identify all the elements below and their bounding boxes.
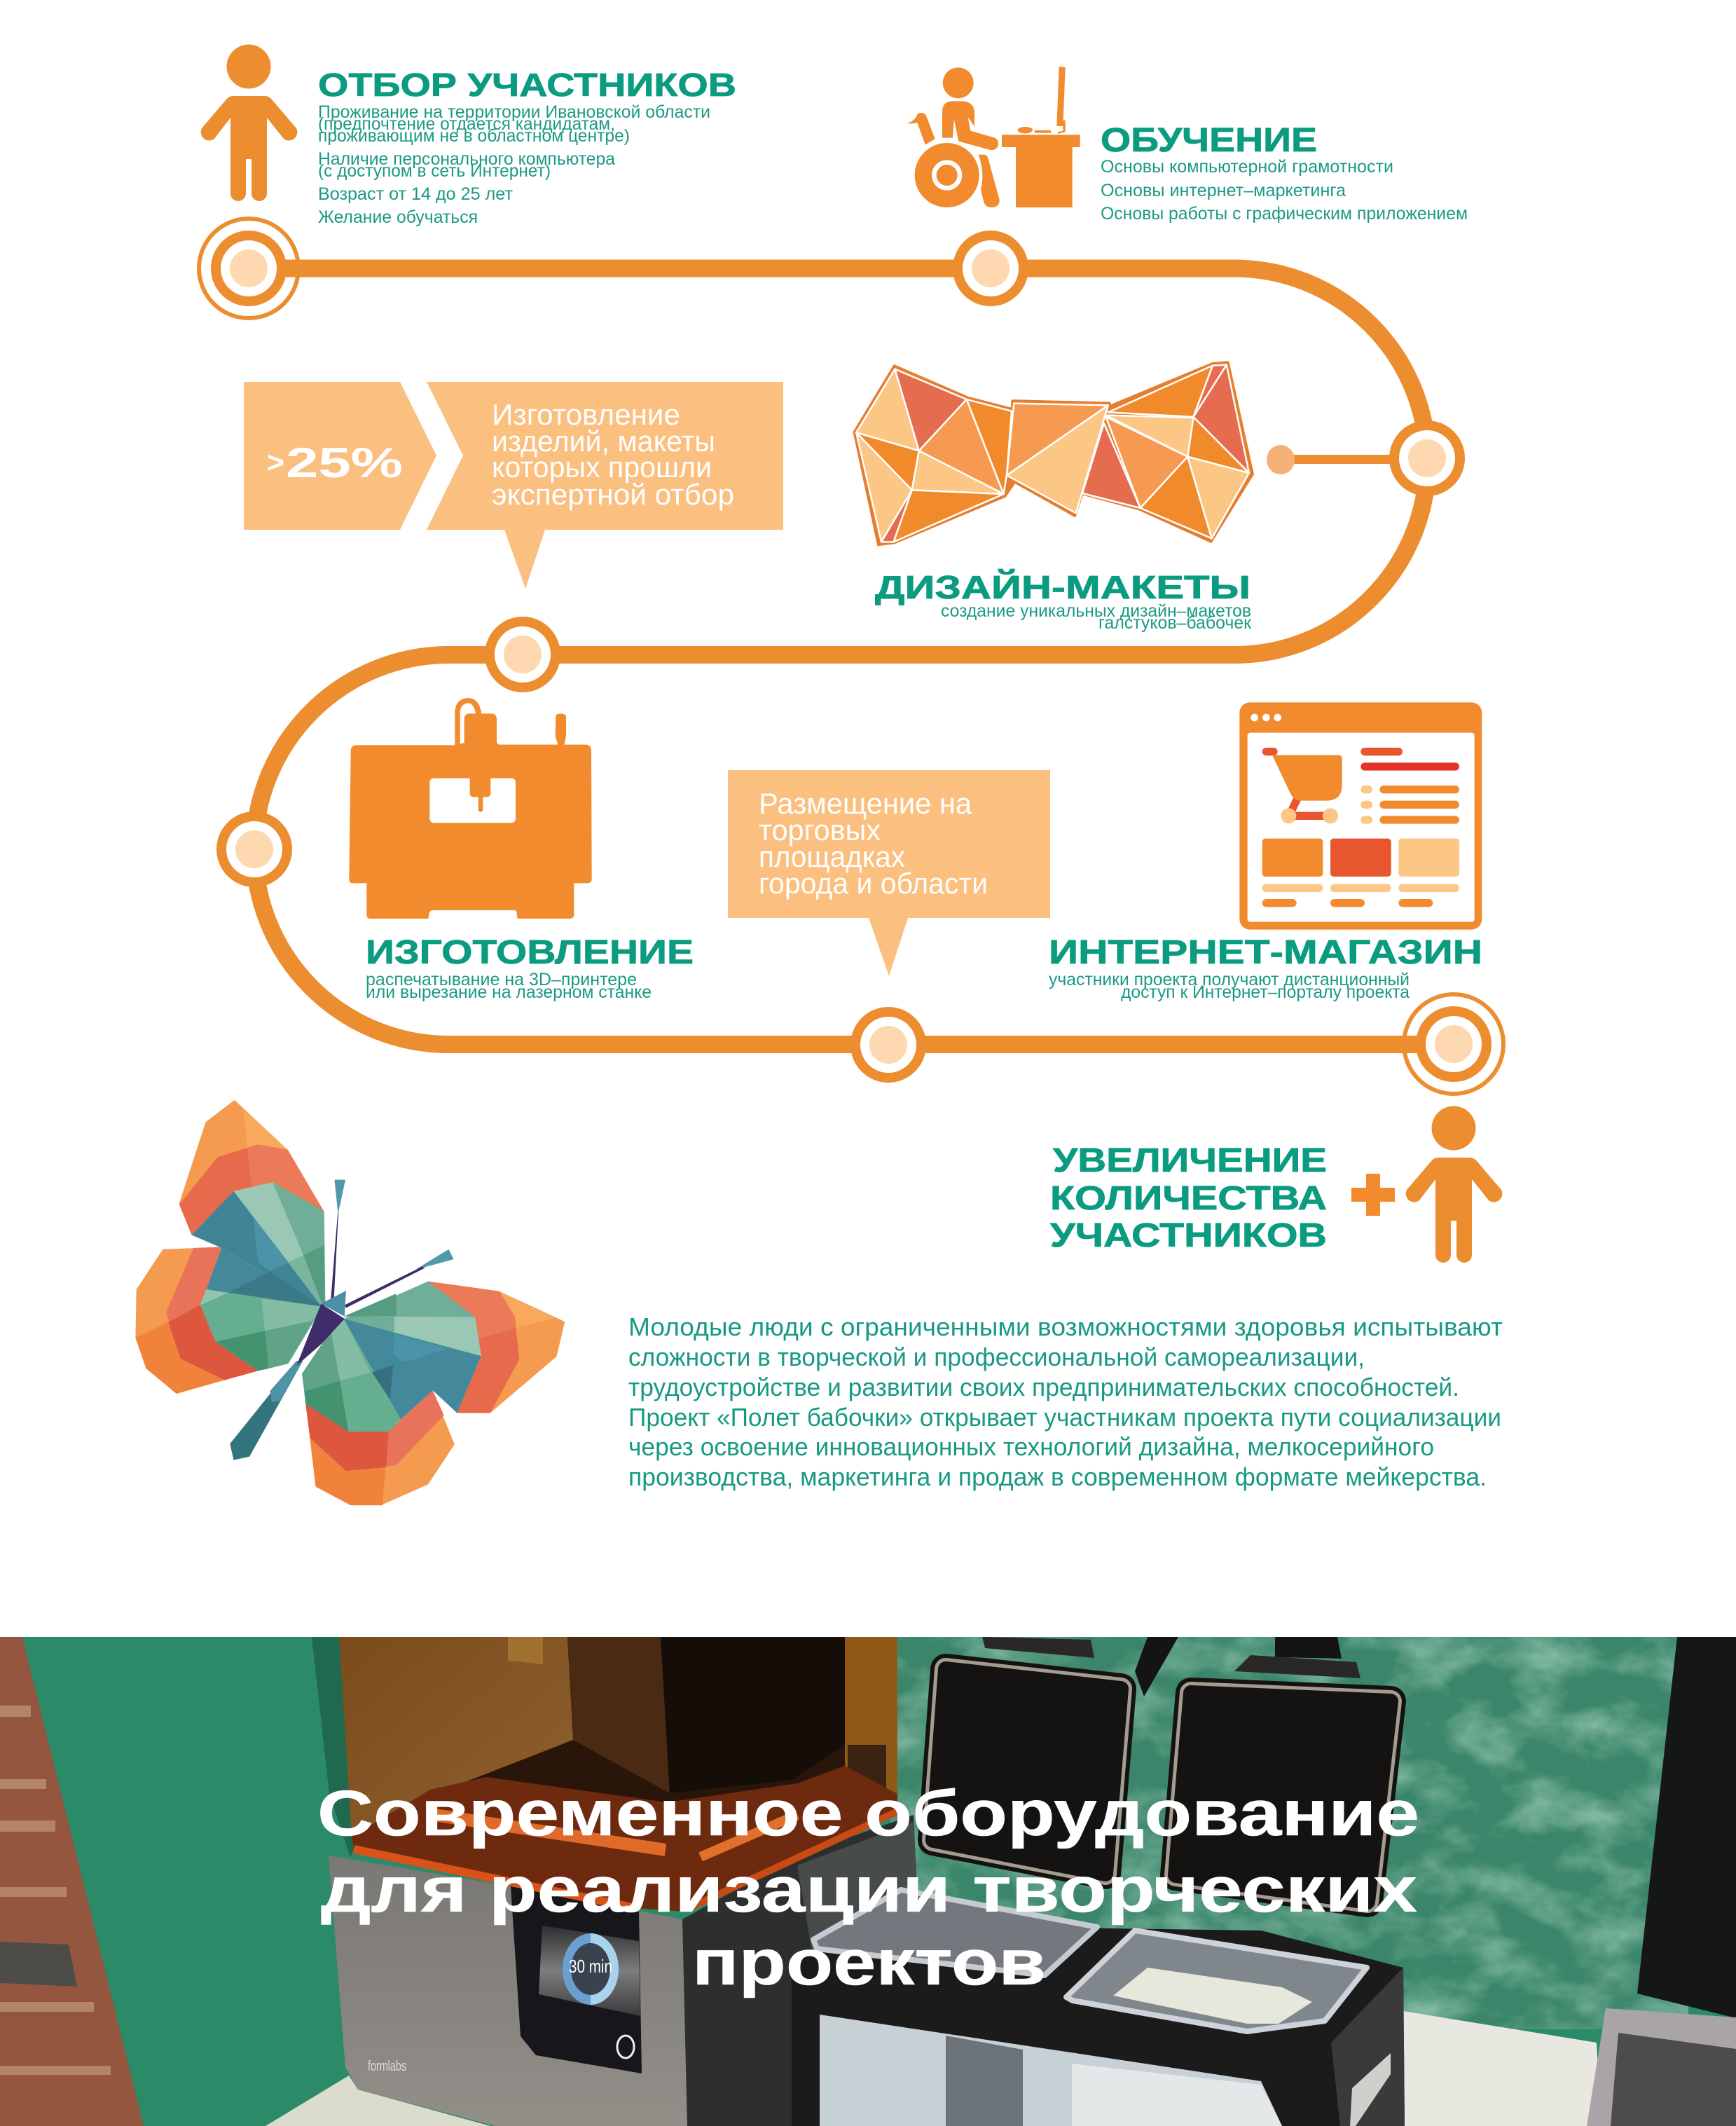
heading: photo title: Современное оборудование	[317, 1778, 1419, 1849]
text block: selection criteria: (предпочтение отдается кандидатам,	[318, 114, 615, 134]
timeline node 2	[958, 235, 1024, 301]
callout: retail placement: торговых	[759, 814, 881, 846]
heading: manufacturing: ИЗГОТОВЛЕНИЕ	[366, 934, 694, 971]
heading: participant growth: УВЕЛИЧЕНИЕ	[1053, 1142, 1327, 1179]
resin tank lid left	[933, 1637, 1121, 1874]
icon: wheelchair user at desk	[906, 67, 1080, 207]
timeline node 7	[1404, 994, 1503, 1094]
panel: participant growth	[1050, 1106, 1502, 1263]
text block: manufacturing description: или вырезание на лазерном станке	[366, 982, 652, 1002]
timeline node 5	[221, 816, 287, 882]
connector: bow tie to node	[1267, 445, 1427, 474]
text block: project description	[628, 1312, 1503, 1491]
icon: polygonal bow tie	[854, 362, 1253, 545]
timeline node 1	[199, 219, 298, 318]
text block: selection criteria: проживающим не в областном центре)	[318, 126, 630, 146]
panel: photo of equipment	[0, 1637, 1736, 2126]
text block: manufacturing description	[366, 970, 652, 1002]
icon: online shop window	[1239, 702, 1482, 930]
text block: training topics	[1101, 157, 1468, 224]
panel: design mockups	[875, 569, 1252, 633]
icon: person bottom	[1406, 1106, 1502, 1263]
panel: online shop	[1049, 934, 1482, 1002]
printer hood	[339, 1637, 897, 1912]
heading: photo title: для реализации творческих	[321, 1854, 1417, 1926]
timeline node 3	[1394, 425, 1460, 491]
callout: retail placement: города и области	[759, 867, 988, 900]
text block: design description: создание уникальных дизайн–макетов	[941, 601, 1251, 621]
text block: selection criteria: (с доступом в сеть Интернет)	[318, 161, 551, 181]
text block: selection criteria: Наличие персонального компьютера	[318, 149, 615, 169]
heading: training: ОБУЧЕНИЕ	[1101, 122, 1317, 159]
timeline node 4	[490, 622, 556, 687]
text block: project description: производства, маркетинга и продаж в современном формате мейкерства.	[628, 1462, 1487, 1491]
callout: 25 percent	[244, 382, 436, 530]
callout: retail placement: Размещение на	[759, 787, 972, 820]
text block: design description: галстуков–бабочек	[1098, 613, 1252, 633]
wash tray	[792, 1890, 1405, 2126]
callout: expert selection: которых прошли	[492, 451, 712, 484]
callout: expert selection: Изготовление	[492, 398, 680, 431]
text block: online shop description	[1049, 970, 1410, 1002]
printer body	[329, 1815, 919, 2126]
icon: person top	[201, 45, 297, 201]
text block: project description: трудоустройстве и развитии своих предпринимательских способностей.	[628, 1373, 1459, 1401]
callout: 25 percent: >	[267, 446, 284, 479]
callout: expert selection	[427, 382, 783, 589]
callout: 25 percent: 25%	[286, 439, 403, 486]
callout: retail placement: площадках	[759, 840, 905, 873]
text block: selection criteria: Желание обучаться	[318, 207, 478, 227]
text block: online shop description: участники проекта получают дистанционный	[1049, 970, 1410, 989]
heading: photo title	[317, 1778, 1419, 1998]
panel: selection of participants	[318, 67, 736, 227]
panel: training	[1101, 122, 1468, 224]
callout: expert selection: экспертной отбор	[492, 478, 734, 511]
heading: participant growth: УЧАСТНИКОВ	[1050, 1217, 1327, 1254]
heading: online shop: ИНТЕРНЕТ-МАГАЗИН	[1049, 934, 1482, 971]
heading: participant growth	[1050, 1142, 1327, 1254]
text block: online shop description: доступ к Интернет–порталу проекта	[1121, 982, 1410, 1002]
brick wall left	[0, 1637, 144, 2126]
heading: participant growth: КОЛИЧЕСТВА	[1050, 1180, 1327, 1217]
icon: polygonal butterfly	[135, 1100, 565, 1505]
resin tank lid right	[1176, 1637, 1391, 1902]
text block: project description: сложности в творческой и профессиональной самореализации,	[628, 1343, 1365, 1371]
text block: selection criteria: Возраст от 14 до 25 лет	[318, 184, 514, 204]
callout: expert selection: изделий, макеты	[492, 425, 715, 458]
icon: cnc machine	[349, 698, 592, 919]
panel: manufacturing	[366, 934, 694, 1002]
text block: project description: Проект «Полет бабочки» открывает участникам проекта пути социализации	[628, 1403, 1501, 1432]
text block: training topics: Основы компьютерной грамотности	[1101, 157, 1393, 177]
text block: project description: через освоение инновационных технологий дизайна, мелкосерийного	[628, 1432, 1434, 1461]
text block: selection criteria	[318, 102, 710, 227]
heading: design mockups: ДИЗАЙН-МАКЕТЫ	[875, 569, 1251, 605]
green painted wall	[890, 1637, 1688, 2029]
text block: design description	[941, 601, 1252, 633]
heading: selection: ОТБОР УЧАСТНИКОВ	[318, 67, 736, 103]
printer body: formlabs	[368, 2059, 406, 2074]
text block: training topics: Основы интернет–маркетинга	[1101, 181, 1346, 200]
timeline node 6	[855, 1012, 921, 1078]
heading: photo title: проектов	[692, 1927, 1046, 1998]
timeline path	[248, 268, 1454, 1044]
text block: training topics: Основы работы с графическим приложением	[1101, 204, 1468, 224]
icon: plus	[1351, 1174, 1395, 1216]
text block: project description: Молодые люди с ограниченными возможностями здоровья испытывают	[628, 1312, 1503, 1341]
printer body: 30 min	[569, 1956, 612, 1977]
text block: manufacturing description: распечатывание на 3D–принтере	[366, 970, 637, 989]
callout: retail placement	[728, 770, 1050, 976]
text block: selection criteria: Проживание на территории Ивановской области	[318, 102, 710, 122]
